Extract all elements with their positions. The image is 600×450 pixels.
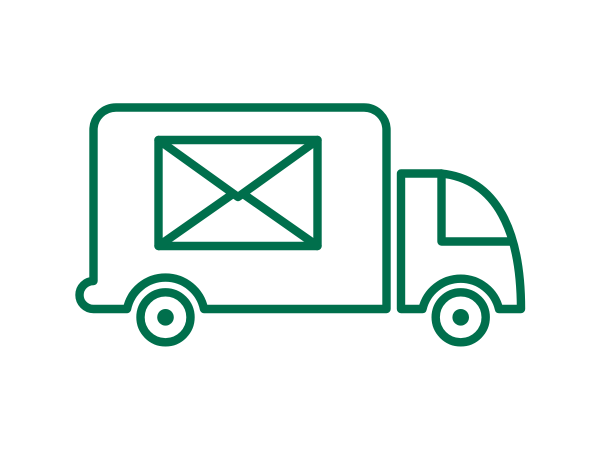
envelope on cargo box — [158, 140, 318, 246]
cargo box body — [80, 108, 386, 309]
envelope lower folds — [158, 194, 318, 246]
cab window — [442, 174, 510, 242]
rear wheel — [140, 292, 190, 342]
front wheel — [436, 292, 486, 342]
envelope outline — [158, 140, 318, 246]
truck cab — [401, 174, 521, 309]
envelope flap — [158, 140, 318, 197]
